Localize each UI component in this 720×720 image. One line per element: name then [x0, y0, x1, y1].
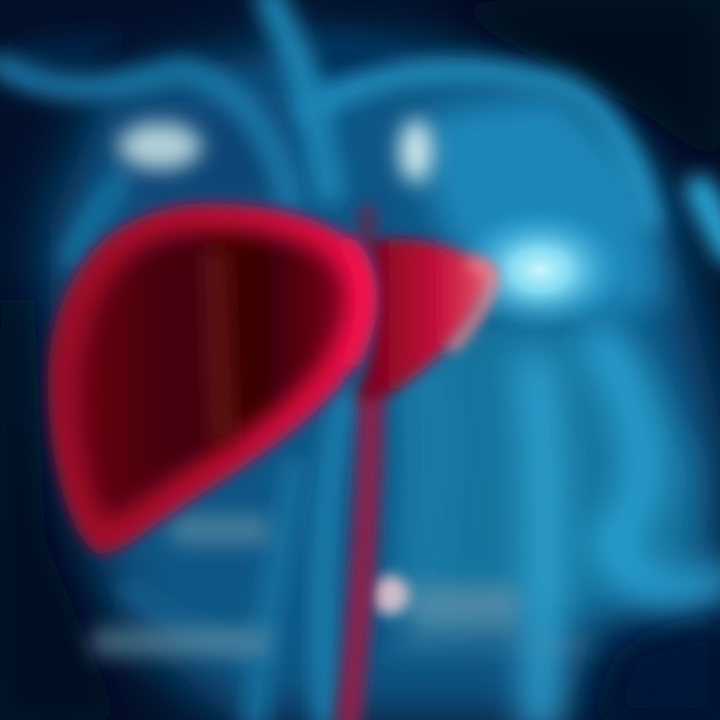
pale spot marker: [370, 575, 410, 615]
liver right lobe: [358, 239, 494, 400]
icon: bright glow beside liver: [455, 208, 625, 332]
faint pale label marks: [90, 515, 600, 656]
liver: [48, 203, 494, 554]
white highlights: [118, 119, 433, 183]
red vessel below liver: [348, 205, 372, 720]
liver left lobe: [48, 203, 376, 554]
